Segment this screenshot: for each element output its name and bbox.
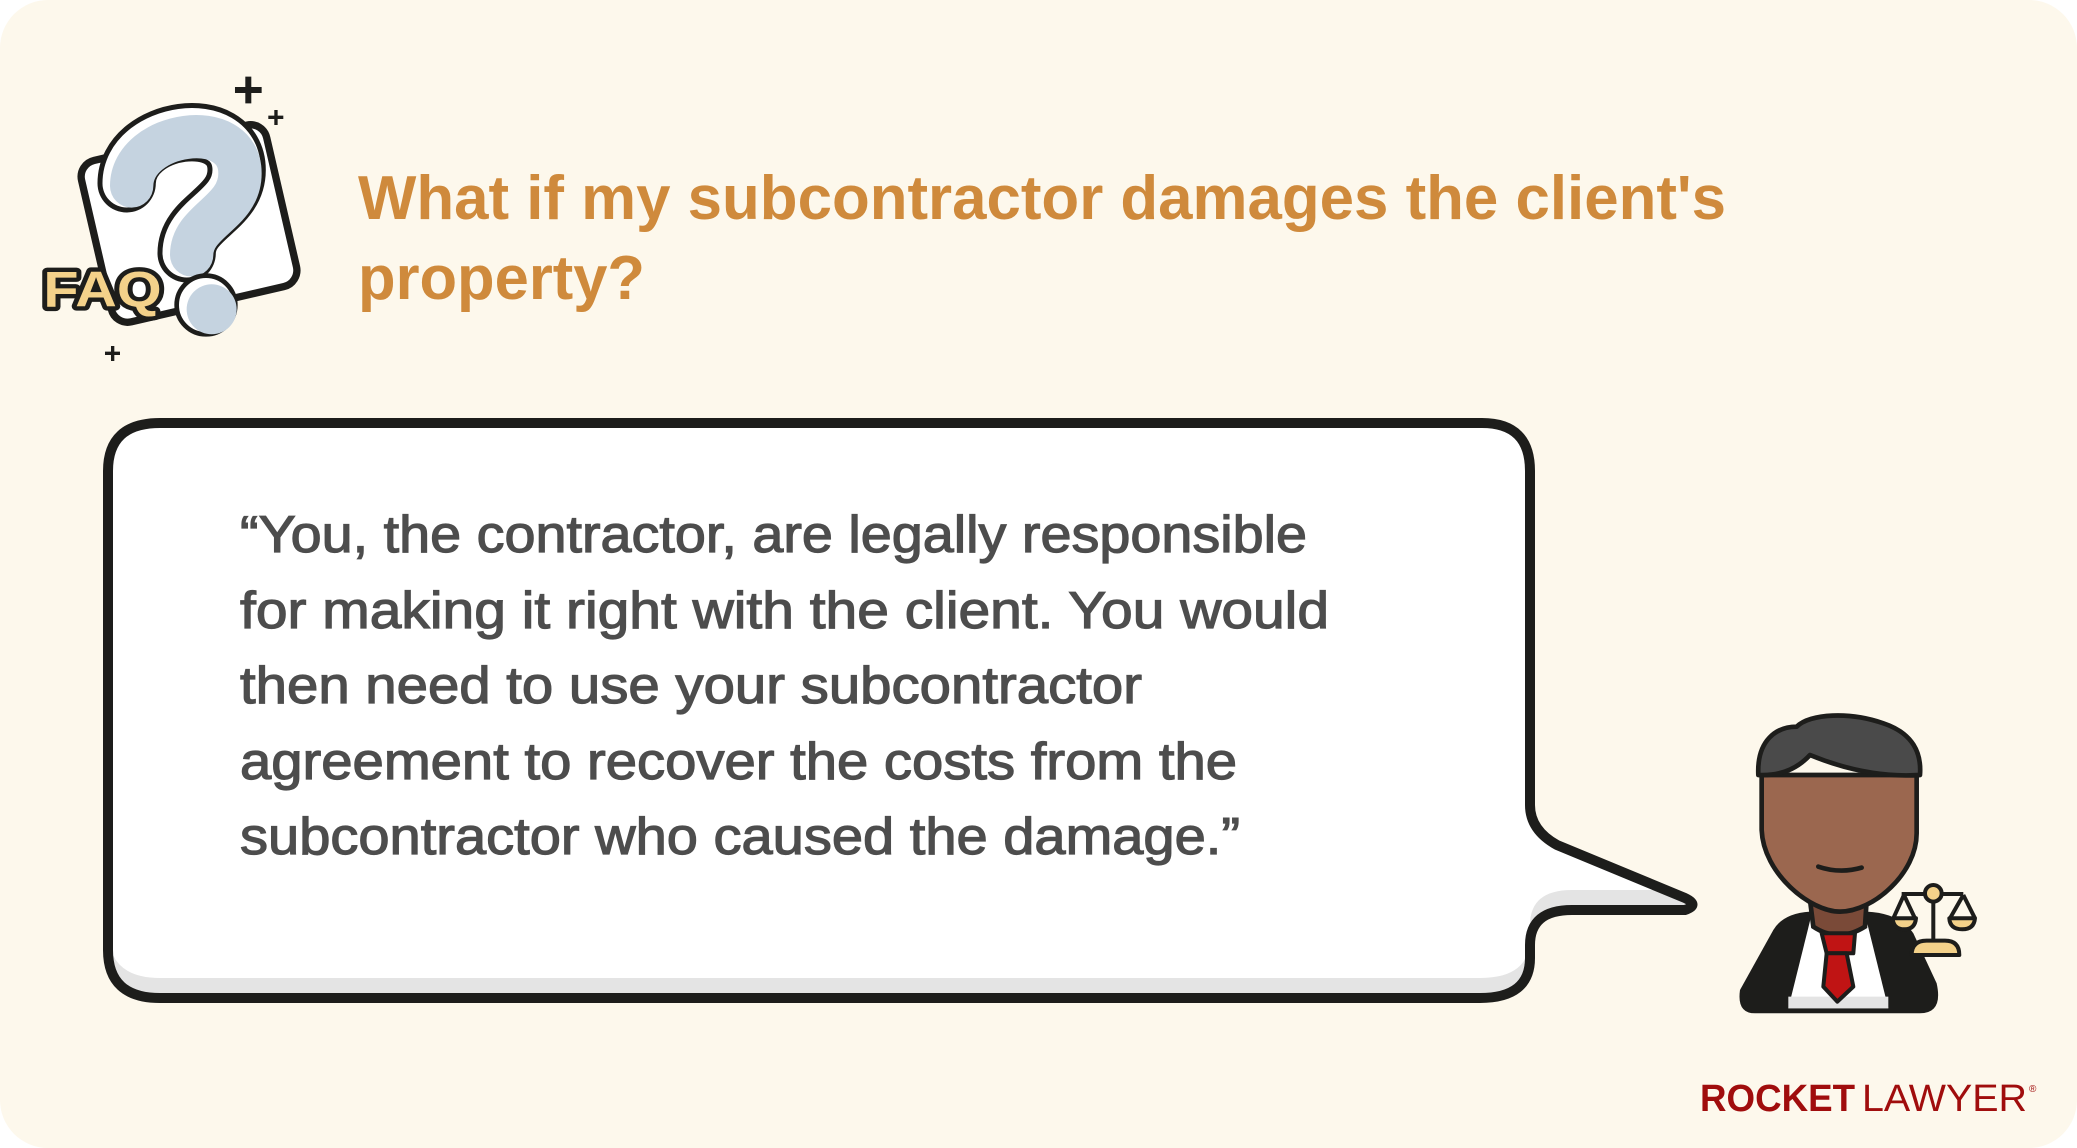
speech bubble [100,403,1720,1015]
title: property? [358,244,645,313]
quote text: for making it right with the client. You would [240,582,1329,640]
quote text: then need to use your subcontractor [240,657,1142,715]
logo: Rocket Lawyer: ROCKET [1700,1078,1855,1120]
icon: FAQ question card [43,77,300,361]
title: What if my subcontractor damages the client's [358,164,1726,233]
quote text [240,506,1329,866]
logo: Rocket Lawyer [1700,1078,2037,1120]
icon: FAQ question card: FAQ [43,262,162,318]
quote text: “You, the contractor, are legally responsible [240,506,1307,564]
quote text: subcontractor who caused the damage.” [240,808,1240,866]
title [358,164,1726,313]
icon: lawyer with scales [1739,716,1975,1013]
logo: Rocket Lawyer: ® [2029,1084,2037,1095]
logo: Rocket Lawyer: LAWYER [1862,1078,2027,1120]
quote text: agreement to recover the costs from the [240,733,1237,791]
